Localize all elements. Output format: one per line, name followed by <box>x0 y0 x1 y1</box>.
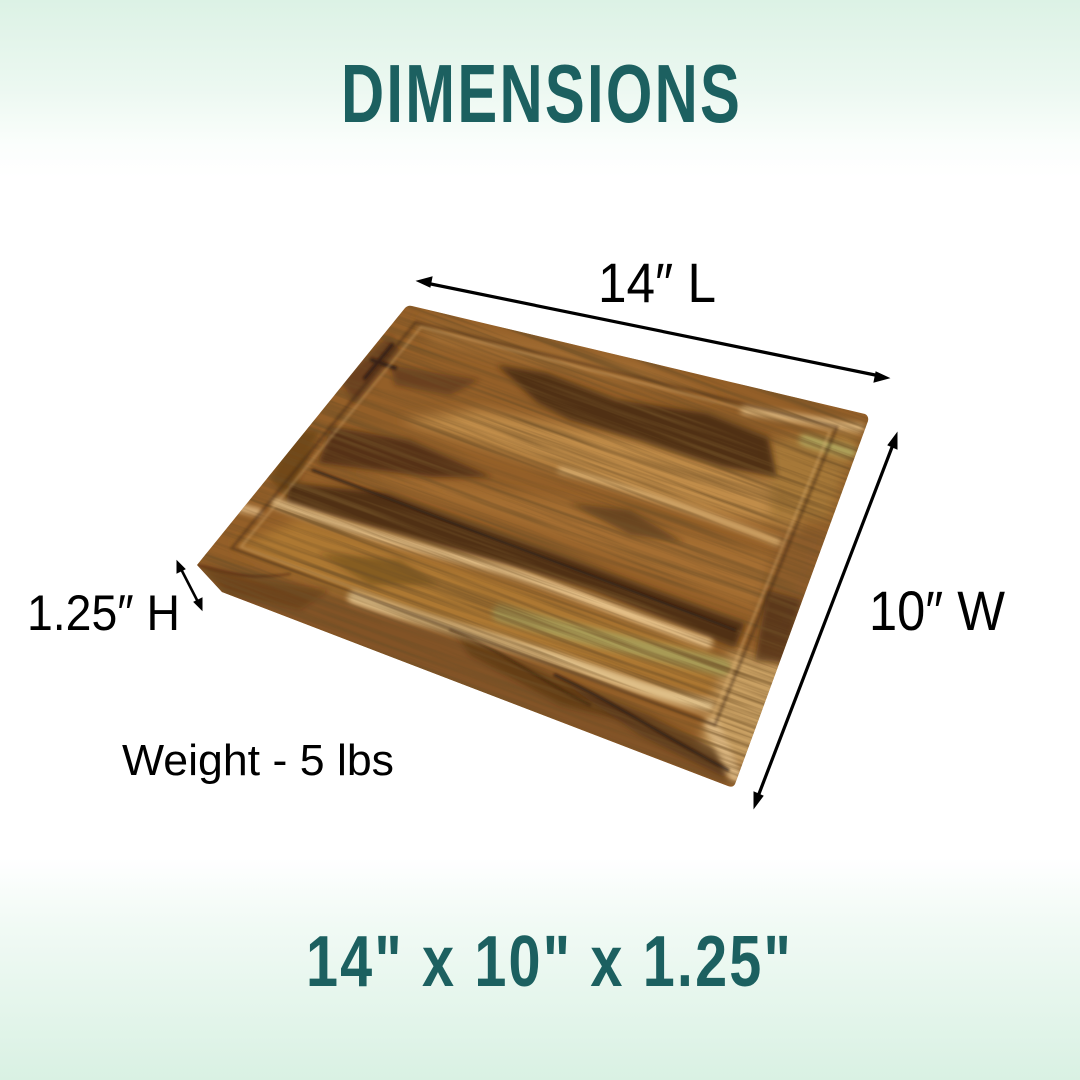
board base wood colour <box>197 306 868 787</box>
dark grain lines <box>198 345 735 770</box>
footer dimensions: 14" x 10" x 1.25" <box>306 921 791 1001</box>
label: weight: Weight - 5 lbs <box>122 736 394 785</box>
wood grain texture <box>198 306 868 785</box>
cutting board <box>197 306 868 787</box>
dimension arrow: width <box>754 433 897 808</box>
juice groove <box>232 322 837 725</box>
dark grain patches <box>198 335 802 778</box>
dimension arrow: length <box>417 277 889 382</box>
label: length: 14″ L <box>598 251 716 314</box>
broad colour zones <box>200 318 860 790</box>
label: width: 10″ W <box>869 579 1005 642</box>
pale grain stripes <box>228 410 860 775</box>
title: DIMENSIONS <box>341 49 740 140</box>
dimension arrow: height <box>177 561 202 610</box>
label: height: 1.25″ H <box>27 585 180 641</box>
